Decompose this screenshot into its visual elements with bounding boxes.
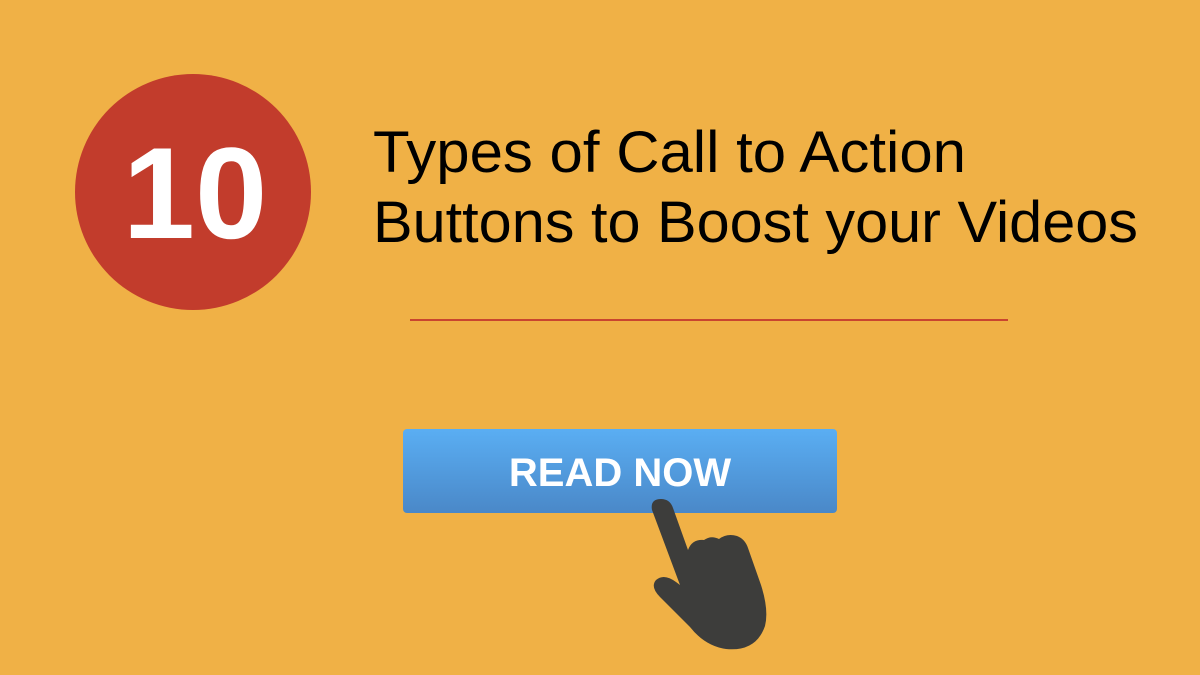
button: read now: READ NOW [509,451,731,495]
badge: number 10 [75,74,311,310]
title [373,120,1138,255]
title: Types of Call to Action [373,120,966,185]
button: read now [403,429,837,513]
icon: pointing hand [652,499,766,649]
badge: number 10: 10 [123,120,267,266]
divider line [410,319,1008,321]
title: Buttons to Boost your Videos [373,190,1138,255]
